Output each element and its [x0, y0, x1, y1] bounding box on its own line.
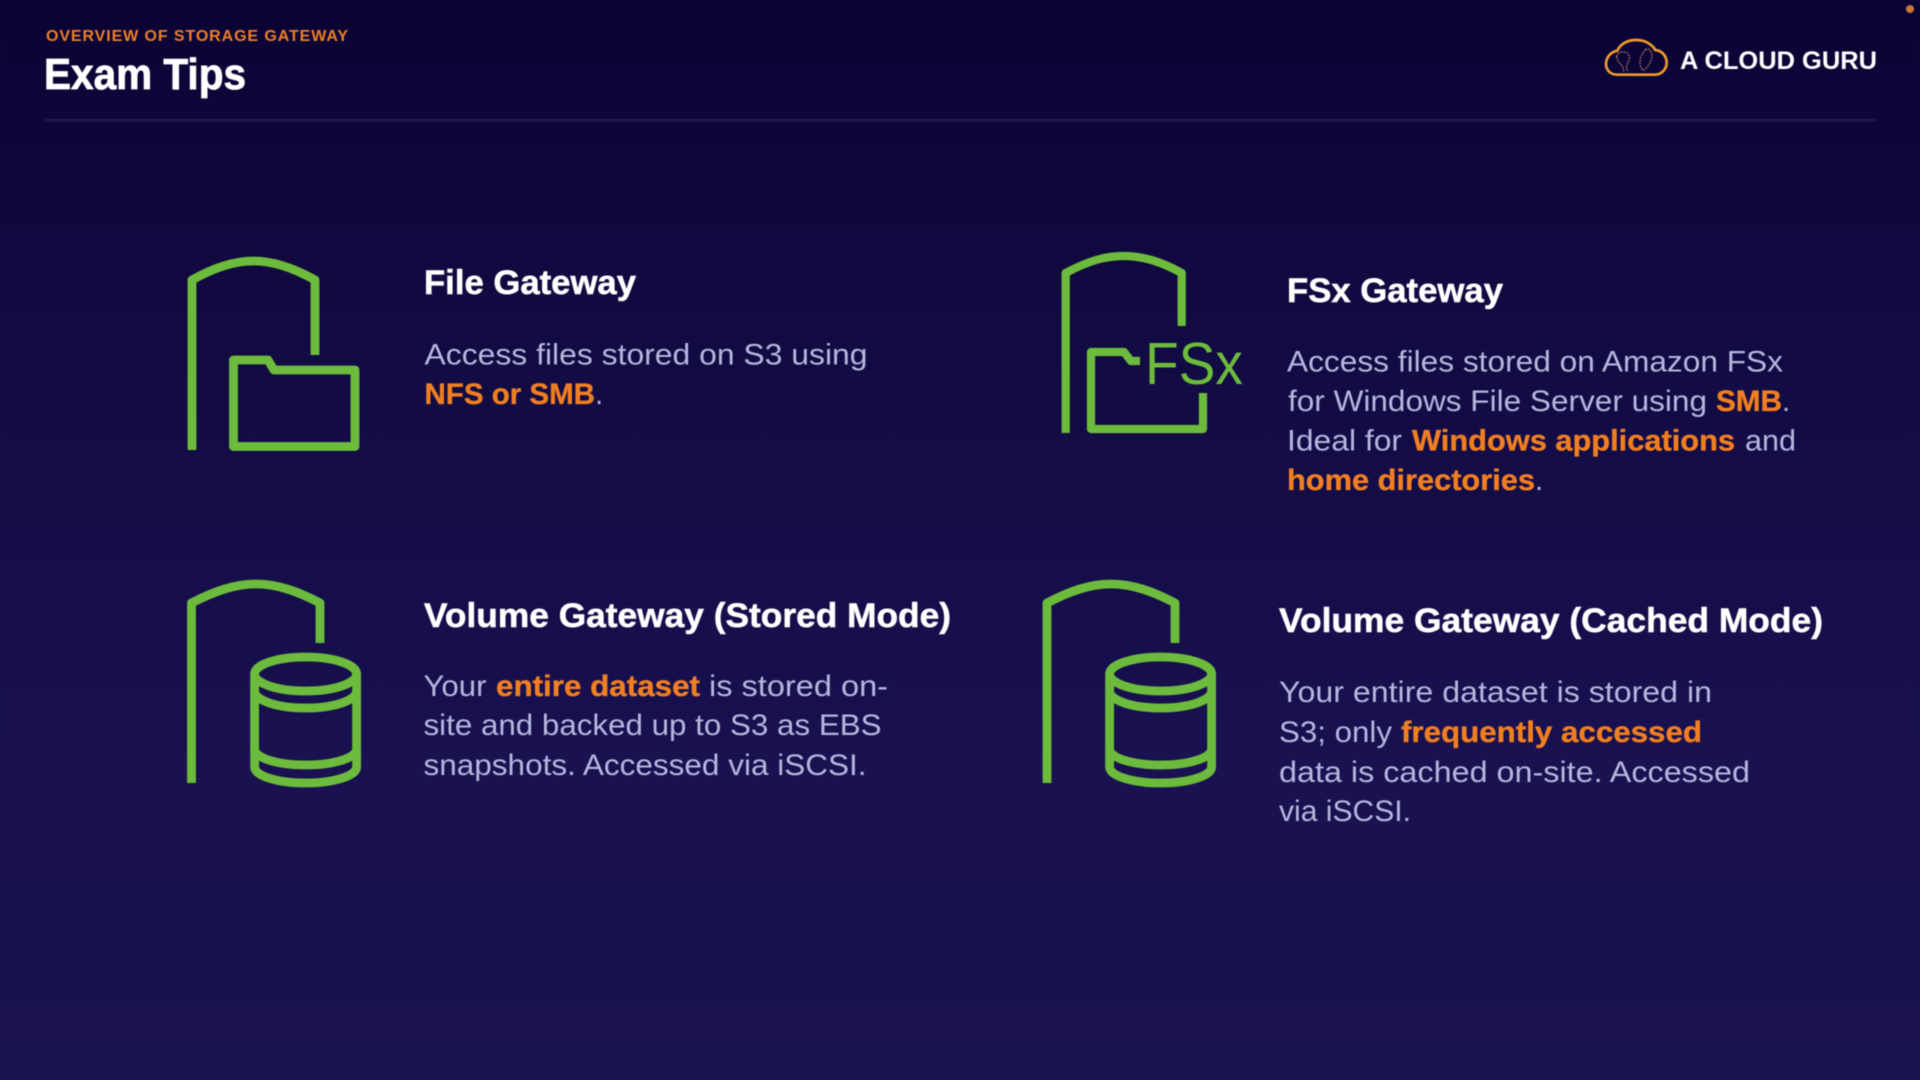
panel: FSx Gateway: [1066, 256, 1796, 497]
description: .: [1535, 464, 1543, 497]
description: via iSCSI.: [1279, 795, 1411, 828]
heading: File Gateway: [424, 264, 636, 302]
header eyebrow: OVERVIEW OF STORAGE GATEWAY: [46, 28, 348, 45]
description: frequently accessed: [1401, 716, 1702, 749]
description: is stored on-: [709, 670, 888, 703]
description: NFS or SMB: [424, 378, 595, 411]
description: [424, 670, 888, 782]
description: [1279, 676, 1750, 828]
description: [1287, 346, 1796, 497]
description: Access files stored on Amazon FSx: [1287, 346, 1783, 378]
icon: gateway with FSx folder: [1066, 256, 1243, 433]
icon: gateway with database: [192, 584, 357, 783]
title: Exam Tips: [44, 50, 246, 99]
description: .: [595, 378, 603, 411]
description: site and backed up to S3 as EBS: [424, 709, 882, 742]
description: for Windows File Server using: [1288, 385, 1707, 418]
description: Ideal for: [1287, 424, 1402, 458]
heading: Volume Gateway (Stored Mode): [424, 597, 951, 635]
icon: gateway with FSx folder: FSx: [1145, 331, 1243, 397]
heading: Volume Gateway (Cached Mode): [1279, 602, 1823, 640]
description: home directories: [1287, 464, 1535, 497]
description: entire dataset: [496, 670, 700, 703]
panel: Volume Gateway (Cached Mode): [1047, 584, 1823, 828]
description: [424, 338, 868, 411]
icon: gateway with database: [1047, 584, 1212, 783]
icon: gateway with folder: [192, 261, 355, 450]
logo wordmark: A CLOUD GURU: [1680, 47, 1877, 75]
description: snapshots. Accessed via iSCSI.: [424, 749, 866, 782]
description: Windows applications: [1412, 424, 1735, 458]
description: Your entire dataset is stored in: [1279, 676, 1712, 709]
description: Your: [424, 670, 487, 703]
logo: A Cloud Guru: [1606, 40, 1877, 75]
description: S3; only: [1279, 716, 1392, 749]
panel: Volume Gateway (Stored Mode): [192, 584, 951, 783]
icon: cloud with figures: [1606, 40, 1667, 75]
panel: File Gateway: [192, 261, 868, 450]
description: Access files stored on S3 using: [424, 338, 868, 372]
description: and: [1745, 424, 1796, 458]
recording dot: [1906, 5, 1914, 13]
description: .: [1782, 385, 1790, 418]
description: data is cached on-site. Accessed: [1279, 756, 1750, 789]
description: SMB: [1716, 385, 1782, 418]
heading: FSx Gateway: [1287, 272, 1503, 310]
